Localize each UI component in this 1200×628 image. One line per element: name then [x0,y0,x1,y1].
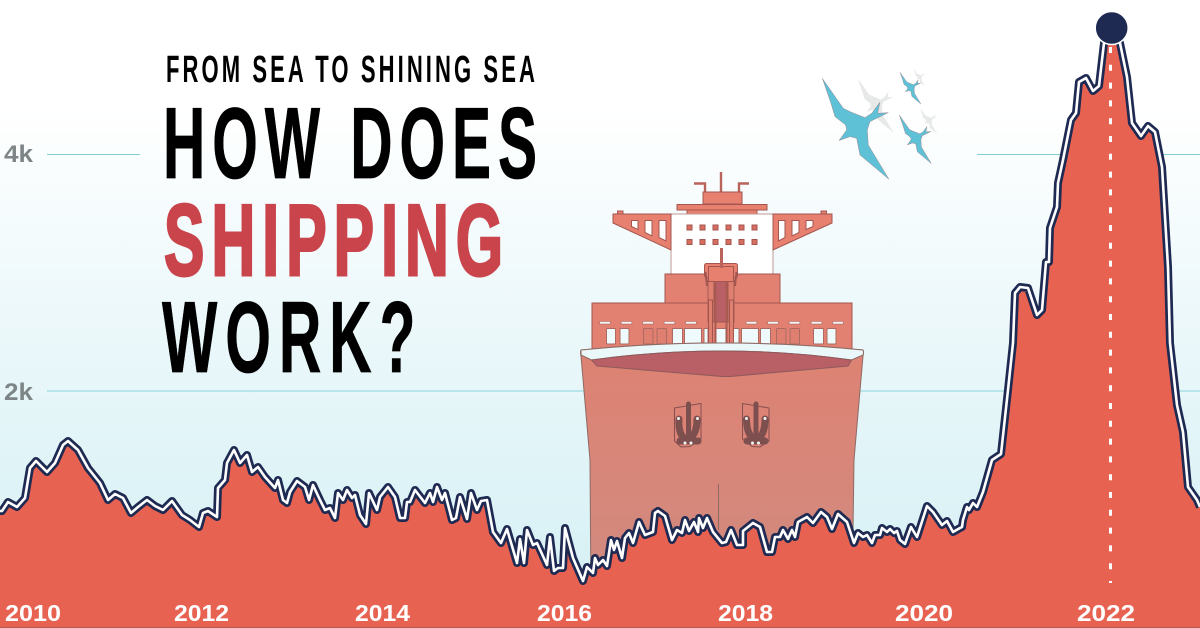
icon: birds [822,68,937,179]
x axis year labels: 2012 [174,600,229,626]
heading line: shipping: SHIPPING [164,184,503,297]
middle superstructure [665,274,780,303]
x axis year labels: 2016 [537,600,592,626]
left bridge wing [613,214,671,250]
bird shadows [858,68,937,134]
heading line: work: WORK? [162,281,415,394]
lower superstructure [592,303,852,350]
subtitle: FROM SEA TO SHINING SEA [166,48,535,91]
y axis gridlines and labels: 4k [4,141,34,168]
blue birds [822,72,931,179]
x axis year labels [5,600,1135,626]
funnel decks [618,192,826,214]
bow dark interior [592,351,852,376]
title block [162,48,537,394]
x axis year labels: 2022 [1077,600,1135,626]
hull stem line [718,484,720,530]
peak dashed marker [1109,47,1112,583]
y axis gridlines and labels: 2k [4,379,34,406]
ship hull [580,343,864,600]
x axis year labels: 2020 [895,600,953,626]
deck white band [581,343,864,360]
central crane column [704,248,738,344]
x axis year labels: 2018 [718,600,773,626]
deck windows [606,328,836,344]
bridge [671,214,773,274]
deck dash windows [600,322,844,324]
icon: left anchor [674,404,701,447]
peak dot [1095,12,1128,44]
x axis year labels: 2014 [355,600,410,626]
icon: right anchor [742,404,769,447]
chart baseline [0,626,1200,628]
ship illustration [580,172,864,600]
mast and antennas [694,172,749,192]
right bridge wing [773,214,832,250]
y axis gridlines and labels [4,141,1200,406]
heading line: how does: HOW DOES [163,87,537,200]
x axis year labels: 2010 [5,600,61,626]
bridge windows [687,225,757,244]
